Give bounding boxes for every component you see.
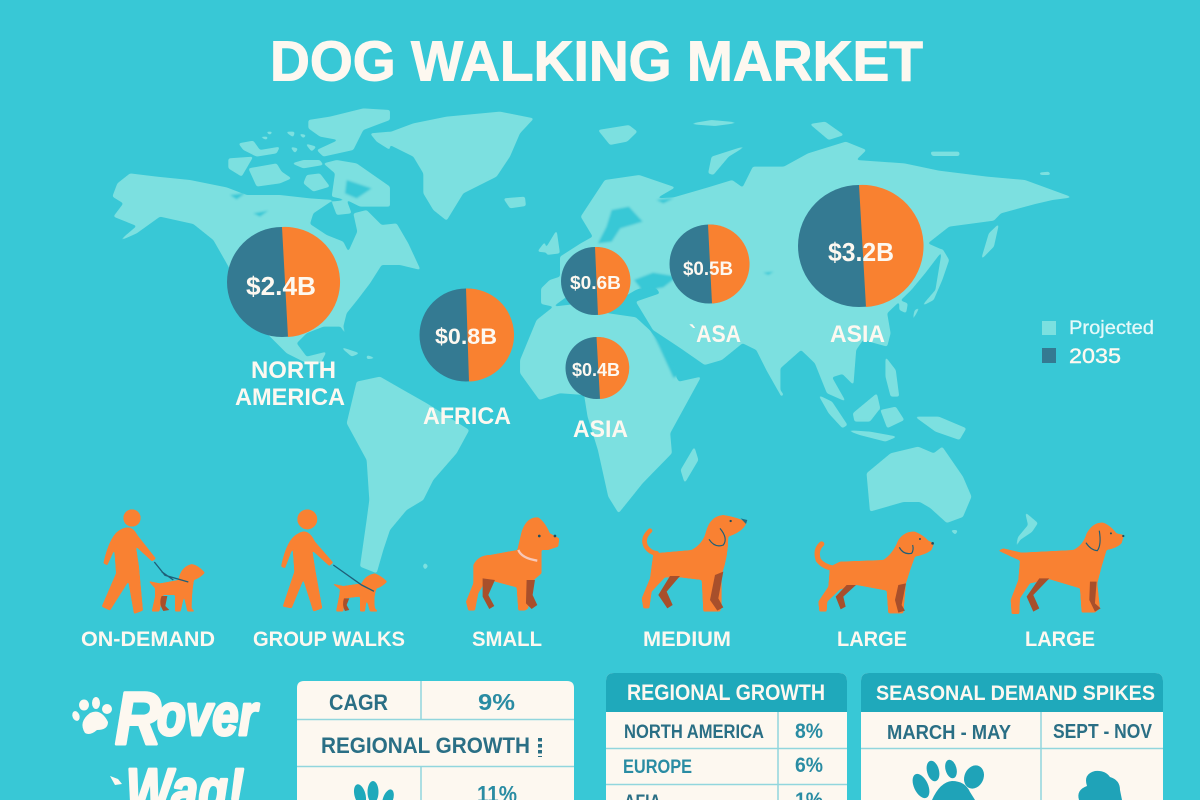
pie: Asia $3.2B — [798, 185, 924, 307]
pie: $0.4B — [566, 337, 629, 399]
logo: Rover Wag: over — [157, 683, 260, 748]
icon: large dog (curled tail) — [817, 532, 934, 613]
panel: CAGR table: REGIONAL GROWTH — [321, 733, 530, 758]
logo: Rover Wag — [71, 677, 260, 800]
panel: regional growth table: REGIONAL GROWTH — [627, 680, 825, 705]
panel: regional growth table: 6% — [795, 754, 823, 777]
label: Asia under $0.4B: ASIA — [573, 416, 628, 443]
panel: seasonal demand spikes — [861, 673, 1163, 800]
icon: on-demand walker — [102, 509, 205, 614]
label: `ASA: `ASA — [689, 321, 741, 348]
panel: seasonal demand spikes: MARCH - MAY — [887, 722, 1012, 744]
pie: North America $2.4B — [227, 227, 340, 337]
label: Asia: ASIA — [830, 321, 885, 348]
pie: North America $2.4B: $2.4B — [246, 271, 316, 301]
pie: $0.5B: $0.5B — [683, 259, 733, 280]
icon: group walks walker — [281, 509, 387, 612]
icon: paw beside Rover — [71, 697, 112, 734]
icon: medium dog — [642, 515, 747, 612]
panel: regional growth table — [606, 673, 847, 800]
pie: $0.4B: $0.4B — [572, 360, 620, 380]
label: Africa: AFRICA — [423, 403, 511, 430]
panel: CAGR table: 9% — [478, 689, 515, 715]
pie: Asia $3.2B: $3.2B — [828, 237, 894, 267]
label: North America: NORTH — [251, 357, 336, 384]
legend — [1042, 318, 1154, 368]
label: large: LARGE — [1025, 628, 1095, 651]
pie: $0.6B — [561, 247, 631, 315]
panel: regional growth table: EUROPE — [623, 757, 692, 778]
icon: paw — [909, 758, 988, 800]
icon: large dog (straight tail) — [998, 523, 1124, 614]
label: North America — [235, 357, 345, 411]
panel: regional growth table: 8% — [795, 720, 823, 743]
panel: seasonal demand spikes: SEPT - NOV — [1053, 721, 1153, 743]
label: large: LARGE — [837, 628, 907, 651]
legend: Projected — [1069, 318, 1154, 339]
panel: regional growth table: NORTH AMERICA — [624, 722, 764, 743]
world map — [112, 108, 1072, 573]
logo: Rover Wag: R — [115, 677, 161, 760]
label: small: SMALL — [472, 628, 542, 651]
label: group walks: GROUP WALKS — [253, 628, 405, 651]
panel: CAGR table: CAGR — [329, 690, 388, 715]
title: DOG WALKING MARKET — [270, 30, 923, 94]
icon: paw blob — [1078, 771, 1122, 800]
legend: 2035 — [1069, 345, 1121, 368]
panel: CAGR table — [297, 681, 574, 800]
label: on-demand: ON-DEMAND — [81, 628, 215, 651]
icon: small dog — [466, 517, 559, 611]
pie: $0.6B: $0.6B — [570, 273, 621, 293]
pie: Africa $0.8B — [420, 288, 514, 382]
label: North America: AMERICA — [235, 384, 345, 411]
panel: seasonal demand spikes: SEASONAL DEMAND SPIKES — [876, 682, 1155, 705]
pie: Africa $0.8B: $0.8B — [435, 324, 497, 349]
pie: $0.5B — [670, 224, 750, 304]
label: medium: MEDIUM — [643, 628, 731, 651]
